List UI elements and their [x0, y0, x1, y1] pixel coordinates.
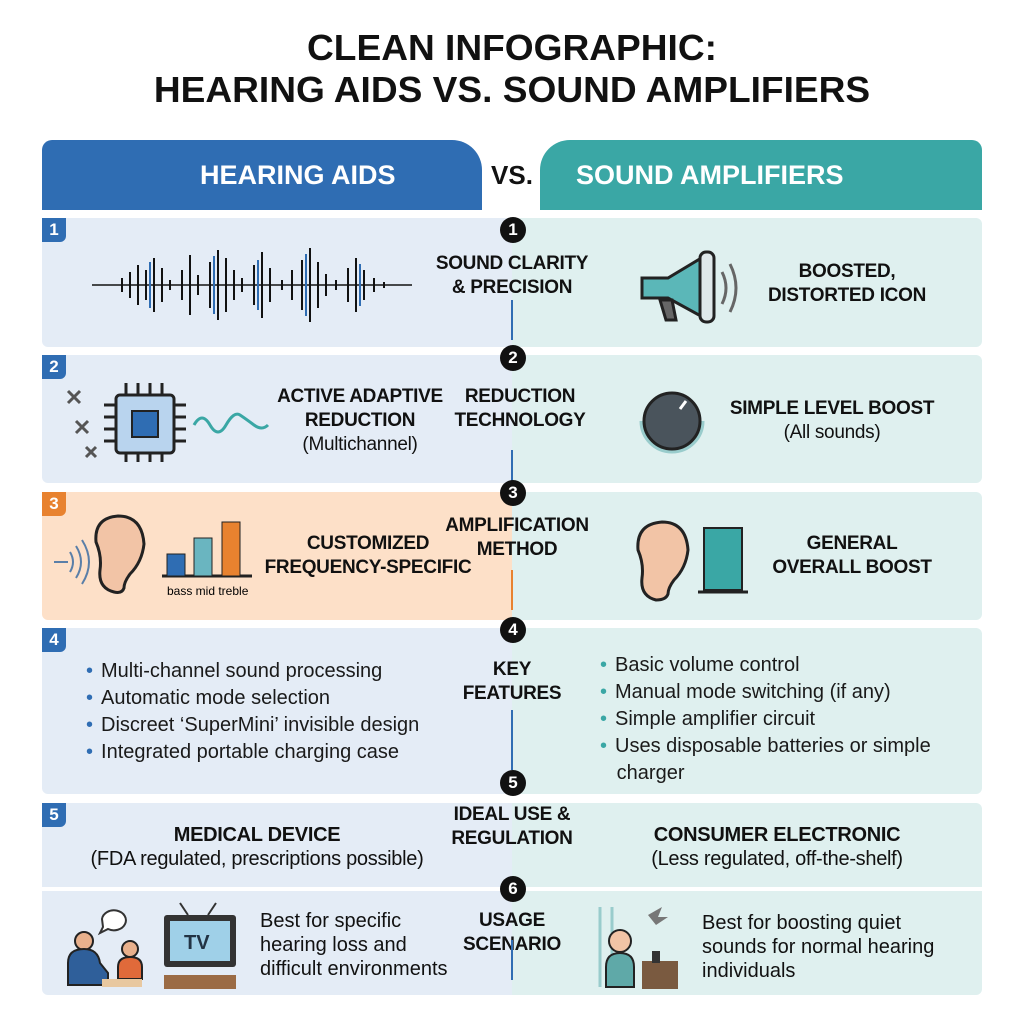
label: general overall boost: OVERALL BOOST — [772, 557, 932, 578]
row 1 panel — [42, 218, 982, 347]
center divider — [511, 300, 513, 980]
icon: ear with single bar — [636, 520, 748, 602]
row 3 panel — [42, 492, 982, 620]
label: simple level boost — [730, 398, 934, 443]
icon: people and tv — [67, 902, 236, 989]
label: consumer electronic: (Less regulated, off-the-shelf) — [651, 848, 903, 870]
text: amplifier scenario: Best for boosting quiet — [702, 912, 901, 934]
label: general overall boost: GENERAL — [807, 533, 897, 554]
label: active adaptive — [277, 386, 443, 455]
header: sound amplifiers: SOUND AMPLIFIERS — [576, 160, 844, 190]
icon: ear with frequency bars: bass mid treble — [167, 584, 249, 598]
label: sound clarity: & PRECISION — [452, 277, 572, 298]
label: consumer electronic — [651, 824, 903, 870]
row 6 panel — [42, 891, 982, 995]
row 3 panel: 3 — [49, 494, 59, 513]
text: hearing aid scenario — [260, 910, 448, 980]
row 2 panel: 2 — [49, 357, 59, 376]
list: hearing aid features: Integrated portable charging case — [101, 741, 399, 763]
list: amplifier features — [600, 654, 931, 784]
label: usage scenario: USAGE — [479, 910, 545, 931]
title: HEARING AIDS VS. SOUND AMPLIFIERS — [154, 69, 870, 110]
label: sound clarity — [436, 253, 588, 298]
label: usage scenario — [463, 910, 561, 955]
label: key features — [463, 659, 561, 704]
number badges: 6 — [508, 879, 518, 898]
label: boosted distorted: BOOSTED, — [799, 261, 895, 282]
icon: ear with frequency bars — [54, 514, 252, 598]
label: key features: FEATURES — [463, 683, 561, 704]
row 4 panel: 4 — [49, 630, 59, 649]
label: medical device: (FDA regulated, prescriptions possible) — [91, 848, 423, 870]
label: active adaptive: (Multichannel) — [302, 434, 418, 455]
header: sound amplifiers — [540, 140, 982, 210]
label: customized — [265, 533, 472, 578]
row 5 panel: 5 — [49, 805, 59, 824]
list: amplifier features: Simple amplifier circuit — [615, 708, 815, 730]
header: hearing aids: HEARING AIDS — [200, 160, 396, 190]
icon: people and tv: TV — [184, 932, 210, 954]
label: ideal use: REGULATION — [451, 828, 573, 849]
label: simple level boost: SIMPLE LEVEL BOOST — [730, 398, 934, 419]
list: hearing aid features: Discreet ‘SuperMini’ invisible design — [101, 714, 419, 736]
label: boosted distorted: DISTORTED ICON — [768, 285, 926, 306]
label: customized: CUSTOMIZED — [307, 533, 429, 554]
text: amplifier scenario — [702, 912, 934, 982]
list: amplifier features: Uses disposable batteries or simple — [615, 735, 931, 757]
icon: chip and wave — [67, 383, 269, 462]
label: customized: FREQUENCY-SPECIFIC — [265, 557, 471, 578]
list: amplifier features: charger — [617, 762, 684, 784]
text: amplifier scenario: sounds for normal hearing — [702, 936, 934, 958]
title — [154, 27, 870, 110]
header: vs: VS. — [491, 160, 533, 190]
label: sound clarity: SOUND CLARITY — [436, 253, 588, 274]
label: consumer electronic: CONSUMER ELECTRONIC — [654, 824, 900, 846]
label: usage scenario: SCENARIO — [463, 934, 561, 955]
label: boosted distorted — [768, 261, 926, 306]
text: hearing aid scenario: Best for specific — [260, 910, 401, 932]
header: hearing aids — [42, 140, 482, 210]
list: hearing aid features: Automatic mode selection — [101, 687, 330, 709]
text: hearing aid scenario: hearing loss and — [260, 934, 407, 956]
list: amplifier features: Manual mode switching (if any) — [615, 681, 891, 703]
label: active adaptive: ACTIVE ADAPTIVE — [277, 386, 443, 407]
label: reduction technology: TECHNOLOGY — [454, 410, 586, 431]
label: general overall boost — [772, 533, 932, 578]
icon: megaphone — [640, 250, 738, 324]
label: ideal use: IDEAL USE & — [454, 804, 570, 825]
number badges: 4 — [508, 620, 518, 639]
label: key features: KEY — [493, 659, 531, 680]
number badges: 2 — [508, 348, 518, 367]
label: reduction technology: REDUCTION — [465, 386, 575, 407]
icon: person and birds — [598, 907, 678, 989]
title: CLEAN INFOGRAPHIC: — [307, 27, 717, 68]
list: hearing aid features: Multi-channel sound processing — [101, 660, 382, 682]
number badges: 5 — [508, 773, 518, 792]
label: reduction technology — [454, 386, 586, 431]
label: simple level boost: (All sounds) — [784, 422, 880, 443]
label: active adaptive: REDUCTION — [305, 410, 415, 431]
label: ideal use — [451, 804, 573, 849]
number badges: 1 — [508, 220, 518, 239]
row 4 panel — [42, 628, 982, 794]
label: medical device: MEDICAL DEVICE — [174, 824, 340, 846]
list: hearing aid features — [86, 660, 419, 763]
list: amplifier features: Basic volume control — [615, 654, 800, 676]
label: amplification method: METHOD — [477, 539, 557, 560]
label: medical device — [91, 824, 423, 870]
icon: knob — [640, 392, 704, 454]
row 2 panel — [42, 355, 982, 483]
row 5 panel — [42, 803, 982, 887]
text: hearing aid scenario: difficult environments — [260, 958, 448, 980]
label: amplification method: AMPLIFICATION — [445, 515, 589, 536]
row 1 panel: 1 — [49, 220, 59, 239]
text: amplifier scenario: individuals — [702, 960, 795, 982]
number badges: 3 — [508, 483, 518, 502]
label: amplification method — [445, 515, 589, 560]
icon: sound wave — [92, 248, 412, 322]
